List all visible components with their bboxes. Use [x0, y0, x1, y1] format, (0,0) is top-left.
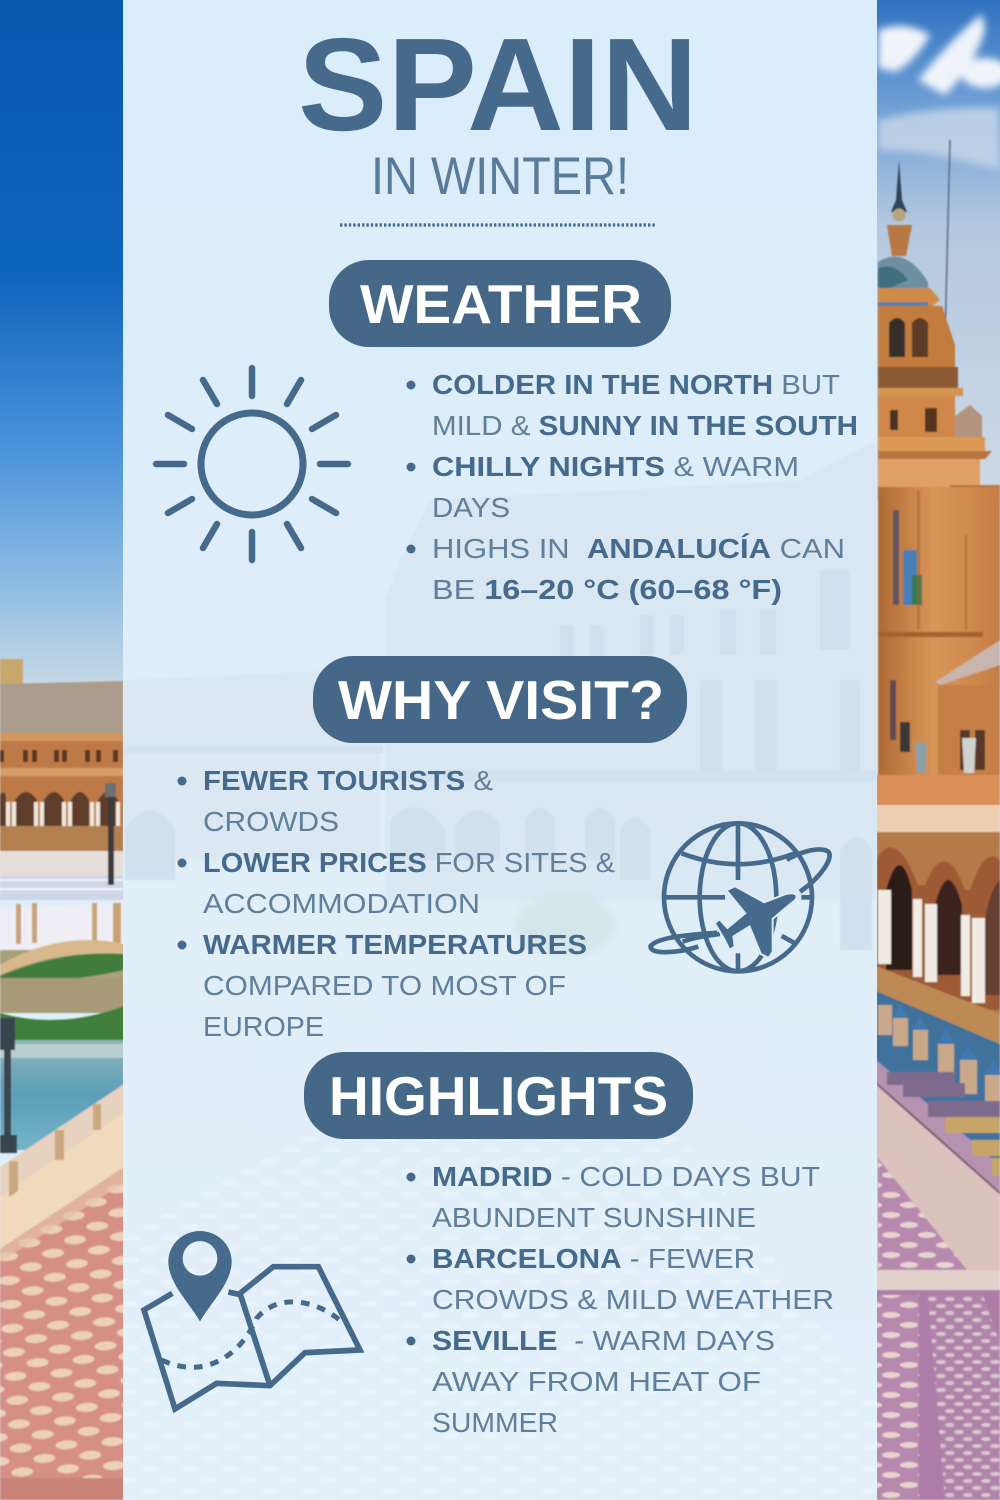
text block: weather bullets: MILD & SUNNY IN THE SOUTH	[432, 410, 858, 441]
heading: SPAIN: SPAIN	[298, 11, 698, 158]
text block: weather bullets: BE 16–20 °C (60–68 °F)	[432, 574, 782, 605]
text block: why visit bullets: LOWER PRICES FOR SITES &	[203, 847, 615, 878]
photo: right strip with tower and arcades	[876, 0, 1000, 1500]
text block: why visit bullets: ACCOMMODATION	[203, 888, 480, 919]
panel: translucent centre column	[123, 0, 877, 1500]
spire	[891, 160, 907, 212]
text block: weather bullets	[406, 369, 858, 605]
text block: weather bullets: DAYS	[432, 492, 510, 523]
icon: map with pin	[144, 1231, 360, 1409]
text block: why visit bullets: CROWDS	[203, 806, 339, 837]
text block: highlights bullets	[406, 1161, 834, 1438]
text block: highlights bullets: CROWDS & MILD WEATHER	[432, 1284, 834, 1315]
icon: globe with plane	[651, 823, 830, 971]
text block: highlights bullets: SUMMER	[432, 1407, 558, 1438]
text block: highlights bullets: ABUNDENT SUNSHINE	[432, 1202, 756, 1233]
text block: highlights bullets: BARCELONA - FEWER	[432, 1243, 755, 1274]
text block: why visit bullets: EUROPE	[203, 1011, 324, 1042]
section heading: highlights: HIGHLIGHTS	[329, 1065, 668, 1127]
photo: left strip of Plaza de España	[0, 0, 124, 1500]
faint palace seen through the panel	[123, 440, 877, 950]
text block: weather bullets: HIGHS IN ANDALUCÍA CAN	[432, 533, 845, 564]
section heading: weather: WEATHER	[360, 273, 642, 335]
text block: why visit bullets: WARMER TEMPERATURES	[203, 929, 587, 960]
subheading: in winter: IN WINTER!	[371, 147, 629, 206]
icon: sun	[156, 368, 348, 560]
text block: highlights bullets: SEVILLE - WARM DAYS	[432, 1325, 775, 1356]
title	[298, 11, 698, 206]
text block: highlights bullets: AWAY FROM HEAT OF	[432, 1366, 761, 1397]
text block: highlights bullets: MADRID - COLD DAYS BUT	[432, 1161, 820, 1192]
bench band, lanterns and tiled benches	[876, 966, 1000, 1044]
text block: why visit bullets	[178, 765, 615, 1042]
section heading: weather	[329, 260, 671, 347]
text block: weather bullets: COLDER IN THE NORTH BUT	[432, 369, 840, 400]
text block: why visit bullets: COMPARED TO MOST OF	[203, 970, 566, 1001]
section heading: why visit: WHY VISIT?	[338, 669, 664, 731]
section heading: highlights	[304, 1052, 693, 1139]
text block: why visit bullets: FEWER TOURISTS &	[203, 765, 493, 796]
text block: weather bullets: CHILLY NIGHTS & WARM	[432, 451, 799, 482]
section heading: why visit	[313, 656, 687, 743]
